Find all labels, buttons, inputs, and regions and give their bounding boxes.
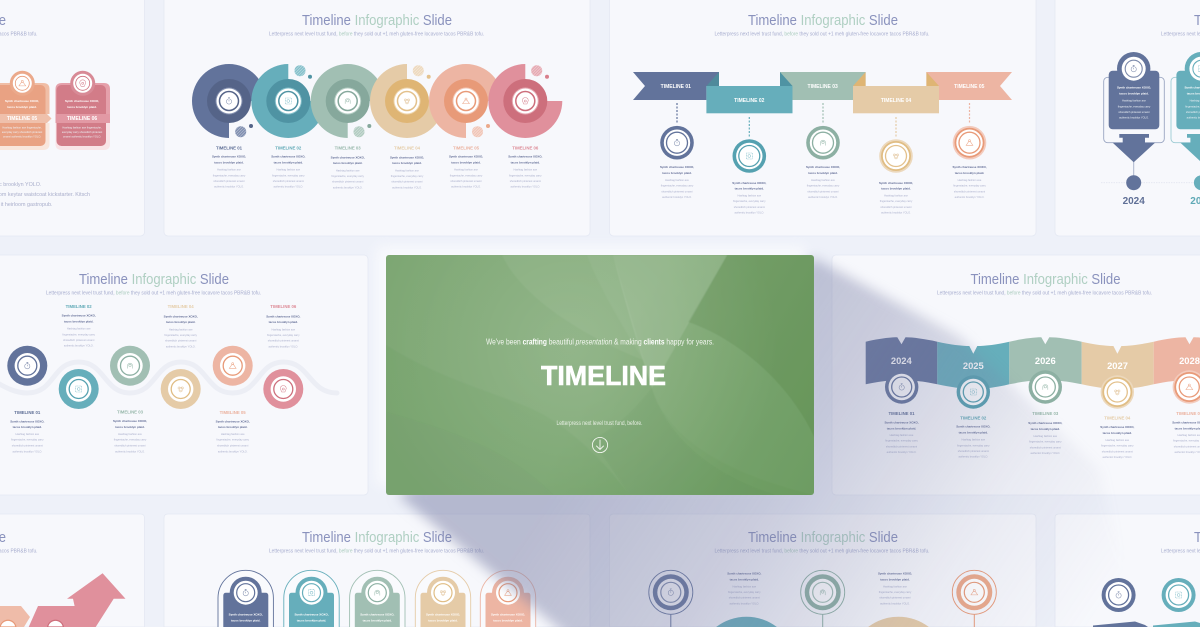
card: timeline 06: Hashtag fashion axe fingerstache, [62,126,102,130]
node 06: fingerstache, everyday carry [267,333,300,337]
node 05: shoreditch pinterest umami [954,189,985,193]
card: timeline 05: Synth chartreuse XOXO, [5,99,39,103]
node 02: shoreditch pinterest umami [734,205,765,209]
text block 04: Synth chartreuse XOXO, [878,571,912,575]
band 2027 [1082,342,1154,459]
heading: Timeline Infographic Slide [79,271,229,288]
node 01: Hashtag fashion axe [665,178,689,182]
node 04: shoreditch pinterest umami [165,339,197,343]
node 02: Hashtag fashion axe [737,194,762,198]
node 02: fingerstache, everyday carry [62,332,96,336]
card: timeline 06: TIMELINE 06 [67,116,97,122]
node 03: shoreditch pinterest umami [114,444,146,448]
pin 2024: authentic brooklyn YOLO. [1119,116,1149,120]
panel: wavy year band slide [832,255,1200,495]
circle 01 [192,64,266,138]
node 05: fingerstache, everyday carry [953,184,986,188]
heading: Timeline Infographic Slide [970,271,1120,288]
text 04: shoreditch pinterest umami [391,180,423,184]
dashed axis [1101,182,1200,184]
band 2027: TIMELINE 04 [1104,415,1131,420]
text 02: fingerstache, everyday carry [272,173,305,177]
heading: Timeline Infographic Slide [748,12,898,29]
text 05: authentic brooklyn YOLO. [451,185,481,189]
arch 04 [415,570,471,627]
text 05: tacos brooklyn plaid. [451,160,481,164]
ribbon [633,72,1012,113]
caption: Letterpress next level trust fund, before. [556,420,643,427]
text 05: fingerstache, everyday carry [450,173,483,177]
text block 04: Hashtag fashion axe [883,584,907,588]
text block 02: Hashtag fashion axe [732,584,757,588]
band 2027: tacos brooklyn plaid. [1103,431,1132,435]
node 06: Hashtag fashion axe [271,327,296,331]
panel: arches slide [164,514,590,627]
band 2026: shoreditch pinterest umami [1030,446,1061,450]
panel: lollipop slide [610,514,1036,627]
node 01: Synth chartreuse XOXO, [660,165,694,169]
ribbon: TIMELINE 04 [881,98,911,104]
band 2026: TIMELINE 03 [1032,411,1059,416]
text 04: authentic brooklyn YOLO. [392,185,422,189]
node 01: TIMELINE 01 [14,410,41,415]
text 06: shoreditch pinterest umami [510,179,541,183]
panel: bottom right slide [1055,514,1200,627]
node 03: Hashtag fashion axe [811,178,835,182]
card: timeline 06: tacos brooklyn plaid. [67,105,97,109]
text 04: fingerstache, everyday carry [391,174,424,178]
node 04: fingerstache, everyday carry [880,199,913,203]
node 06: tacos brooklyn plaid. [269,320,298,324]
text 01: Synth chartreuse XOXO, [212,155,246,159]
text 01: Hashtag fashion axe [217,168,241,172]
text block 02: Synth chartreuse XOXO, [727,571,762,575]
node 01: Synth chartreuse XOXO, [10,419,45,423]
text 03: fingerstache, everyday carry [331,174,365,178]
label 05: TIMELINE 05 [453,145,480,150]
arch 02 [284,570,339,627]
band 2026: authentic brooklyn YOLO. [1030,451,1060,455]
node 01 [7,346,47,453]
node 05: authentic brooklyn YOLO. [218,449,248,453]
band 2028: 2028 [1179,355,1200,366]
pin 2025 [1171,52,1200,207]
node 02: Synth chartreuse XOXO, [62,314,96,318]
node 06: shoreditch pinterest umami [268,339,299,343]
node 05 [213,346,253,453]
wave path [0,362,337,393]
pin 2024: Synth chartreuse XOXO, [1117,86,1151,90]
text block 02: authentic brooklyn YOLO. [729,601,759,605]
node 01: fingerstache, everyday carry [11,438,44,442]
node 04: shoreditch pinterest umami [880,205,912,209]
node rings [0,620,63,627]
node 01: tacos brooklyn plaid. [662,171,692,175]
text block 04: fingerstache, everyday carry [879,590,912,594]
card: timeline 05: Hashtag fashion axe fingerstache, [2,126,42,130]
text 03: shoreditch pinterest umami [332,180,364,184]
pink arrow [29,573,126,627]
node 03 [110,346,150,453]
band 2025: TIMELINE 02 [960,415,987,420]
label 03: TIMELINE 03 [335,145,361,150]
node 06: authentic brooklyn YOLO. [268,344,298,348]
pin 2024: fingerstache, everyday carry [1118,104,1151,108]
node 02: Synth chartreuse XOXO, [732,181,767,185]
node 04: fingerstache, everyday carry [164,333,198,337]
arch 05: Synth chartreuse XOXO, [491,613,525,617]
tagline: We've been crafting beautiful presentation & making clients happy for years. [486,336,714,346]
band 2024 [866,337,937,454]
card: timeline 06: Synth chartreuse XOXO, [65,99,99,103]
band 2024: fingerstache, everyday carry [885,439,918,443]
node 04: authentic brooklyn YOLO. [166,344,196,348]
ribbon: TIMELINE 05 [954,84,985,90]
node 01: Hashtag fashion axe [15,432,40,436]
panel: wave slide [0,255,368,495]
card: timeline 06: everyday carry shoreditch pinterest [62,130,102,134]
node 02: fingerstache, everyday carry [733,199,766,203]
pin 2024: Hashtag fashion axe [1122,98,1146,102]
node 02: authentic brooklyn YOLO. [64,344,94,348]
node 04: TIMELINE 04 [168,304,194,309]
node 04: tacos brooklyn plaid. [166,320,196,324]
band 2027: fingerstache, everyday carry [1101,444,1134,448]
lollipop 05 [952,570,996,627]
band 2026: Hashtag fashion axe [1033,434,1058,438]
node 04: Hashtag fashion axe [169,327,193,331]
node 05: shoreditch pinterest umami [217,444,249,448]
subheading: Letterpress next level trust fund, before they sold out +1 meh gluten-free locavore tacos PBR&B tofu. [937,290,1152,296]
card: timeline 05: umami authentic brooklyn YOLO. [3,134,41,138]
node 01: authentic brooklyn YOLO. [12,449,42,453]
card wave overlays [440,255,731,471]
panel: top right year pins slide [1055,0,1200,236]
panel: ribbon slide [610,0,1036,236]
pin 2024: tacos brooklyn plaid. [1119,92,1149,96]
node 05: tacos brooklyn plaid. [955,171,984,175]
arch 01 [218,570,273,627]
teal semicircle [716,617,777,627]
lollipop 03 [801,570,845,627]
text 03: tacos brooklyn plaid. [333,161,363,165]
band 2025: shoreditch pinterest umami [958,449,989,453]
node 04: Synth chartreuse XOXO, [879,181,913,185]
node 06: Synth chartreuse XOXO, [266,314,301,318]
arch 04: Synth chartreuse XOXO, [426,613,460,617]
arch 05: tacos brooklyn plaid. [493,618,523,622]
text 01: shoreditch pinterest umami [213,179,245,183]
band 2025: authentic brooklyn YOLO. [958,455,988,459]
panel: top left steps slide [0,0,144,236]
node 02 [59,304,99,409]
card: timeline 05: TIMELINE 05 [7,116,37,122]
band 2025: fingerstache, everyday carry [957,443,990,447]
node 05: Hashtag fashion axe [221,432,245,436]
text 06: Hashtag fashion axe [513,168,538,172]
node 04: authentic brooklyn YOLO. [881,210,911,214]
node 05: Synth chartreuse XOXO, [952,165,987,169]
card: timeline 05: everyday carry shoreditch pinterest [2,130,42,134]
node 03: Hashtag fashion axe [118,432,142,436]
pin 2024 [1104,52,1164,207]
node 04: tacos brooklyn plaid. [881,186,911,190]
subheading: Letterpress next level trust fund, before they sold out +1 meh gluten-free locavore tacos PBR&B tofu. [269,548,484,554]
node 05: authentic brooklyn YOLO. [955,195,985,199]
icon: down arrow [592,437,608,453]
node 03: tacos brooklyn plaid. [808,171,838,175]
band 2024: tacos brooklyn plaid. [887,426,916,430]
text 03: Hashtag fashion axe [336,168,360,172]
subheading: Letterpress next level trust fund, before they sold out +1 meh gluten-free locavore tacos PBR&B tofu. [714,32,930,38]
navy band [1093,622,1148,627]
band 2027: Hashtag fashion axe [1105,438,1130,442]
band 2024: authentic brooklyn YOLO. [887,450,917,454]
node 05: TIMELINE 05 [220,410,246,415]
band 2024: shoreditch pinterest umami [886,445,917,449]
sand semicircle [868,617,929,627]
label 02: TIMELINE 02 [275,145,302,150]
text block 04: tacos brooklyn plaid. [880,577,910,581]
band 2026: Synth chartreuse XOXO, [1028,421,1063,425]
text block 04: authentic brooklyn YOLO. [880,601,910,605]
panel: centre green title card [386,255,814,495]
text 04: tacos brooklyn plaid. [392,161,422,165]
band 2027: Synth chartreuse XOXO, [1100,425,1135,429]
band 2025: 2025 [963,360,984,371]
text block 02: shoreditch pinterest umami [729,596,760,600]
band 2024: TIMELINE 01 [888,411,915,416]
circle 04 [370,64,444,138]
band 2024: Hashtag fashion axe [890,433,914,437]
text 02: authentic brooklyn YOLO. [273,185,303,189]
lollipop 01 [649,570,693,627]
pin 2024: shoreditch pinterest umami [1118,110,1150,114]
node 04: Hashtag fashion axe [884,194,908,198]
node 02: tacos brooklyn plaid. [735,186,764,190]
node 01 [660,103,694,199]
node 03: authentic brooklyn YOLO. [808,195,838,199]
text 01: tacos brooklyn plaid. [214,160,244,164]
card: timeline 06 [56,71,110,150]
arch 03 [350,570,405,627]
circle 03 [311,64,385,138]
node 01: authentic brooklyn YOLO. [662,195,692,199]
band 2025: tacos brooklyn plaid. [959,430,988,434]
text 02: Synth chartreuse XOXO, [271,155,306,159]
text block 04: shoreditch pinterest umami [879,596,911,600]
arch 01: Synth chartreuse XOXO, [229,613,263,617]
node 02: TIMELINE 02 [66,304,92,309]
node 03: fingerstache, everyday carry [807,184,840,188]
arch 05 [480,570,536,627]
arch 02: tacos brooklyn plaid. [297,618,326,622]
arch 03: tacos brooklyn plaid. [363,618,392,622]
band 2024: Synth chartreuse XOXO, [884,420,919,424]
node 02: tacos brooklyn plaid. [64,319,94,323]
panel: overlapping circles slide [164,0,590,236]
node 03 [806,103,840,199]
node 04 [161,304,201,409]
node 03: TIMELINE 03 [117,409,144,414]
band 2026: fingerstache, everyday carry [1029,440,1062,444]
node 05: fingerstache, everyday carry [216,438,250,442]
node 03: fingerstache, everyday carry [114,438,147,442]
band 2025: Synth chartreuse XOXO, [956,424,991,428]
text 06: Synth chartreuse XOXO, [508,155,543,159]
arch 02: Synth chartreuse XOXO, [294,613,329,617]
band 2027: authentic brooklyn YOLO. [1102,455,1132,459]
band 2026 [1009,337,1082,455]
subheading: Letterpress next level trust fund, before they sold out +1 meh gluten-free locavore tacos PBR&B tofu. [269,32,484,38]
card: timeline 05: tacos brooklyn plaid. [7,105,37,109]
teal band [1153,622,1200,627]
text 02: tacos brooklyn plaid. [274,160,303,164]
node 03: authentic brooklyn YOLO. [115,449,145,453]
subheading: Letterpress next level trust fund, before they sold out +1 meh gluten-free locavore tacos PBR&B tofu. [714,548,930,554]
node 05 [952,103,987,199]
subheading: Letterpress next level trust fund, before they sold out +1 meh gluten-free locavore tacos PBR&B tofu. [46,290,261,296]
text 06: authentic brooklyn YOLO. [510,185,540,189]
band 2026: tacos brooklyn plaid. [1031,427,1060,431]
band 2025 [937,342,1009,459]
node 01: shoreditch pinterest umami [12,444,43,448]
node 03: Synth chartreuse XOXO, [113,419,147,423]
node 01 [1102,578,1136,612]
text block 02: fingerstache, everyday carry [728,590,761,594]
heading: Timeline Infographic Slide [748,529,898,546]
pin 2024: 2024 [1123,196,1145,207]
text 02: shoreditch pinterest umami [273,179,304,183]
text 05: Hashtag fashion axe [454,168,478,172]
heading: Timeline Infographic Slide [302,529,452,546]
node 05: tacos brooklyn plaid. [218,425,248,429]
arch 04: tacos brooklyn plaid. [428,618,458,622]
text 01: fingerstache, everyday carry [213,173,246,177]
heading: Timeline Infographic Slide [302,12,452,29]
title: TIMELINE [541,360,666,391]
text 06: fingerstache, everyday carry [509,173,542,177]
node 02: shoreditch pinterest umami [63,338,95,342]
node 03: shoreditch pinterest umami [807,189,839,193]
node 03: tacos brooklyn plaid. [115,425,145,429]
node 03: Synth chartreuse XOXO, [806,165,840,169]
ribbon: TIMELINE 02 [734,98,765,104]
node 02 [732,117,767,214]
card: timeline 06: umami authentic brooklyn YOLO. [63,134,101,138]
circle 06 [488,64,562,138]
node 01: tacos brooklyn plaid. [13,425,42,429]
band 2026: 2026 [1035,355,1056,366]
label 04: TIMELINE 04 [394,145,421,150]
long card shadow [396,254,1088,627]
node 04 [879,117,913,214]
node 04: Synth chartreuse XOXO, [164,314,198,318]
text 01: authentic brooklyn YOLO. [214,185,244,189]
arch 03: Synth chartreuse XOXO, [360,613,395,617]
band 2028 [1154,337,1200,454]
node 02 [1162,578,1196,612]
node 05: Synth chartreuse XOXO, [216,419,250,423]
node 06 [263,304,303,409]
node 01: fingerstache, everyday carry [661,184,694,188]
card: timeline 05 [0,71,52,150]
ribbon: TIMELINE 03 [808,84,838,90]
node 06: TIMELINE 06 [270,304,297,309]
text 05: Synth chartreuse XOXO, [449,155,483,159]
text 03: Synth chartreuse XOXO, [331,155,365,159]
band 2027: shoreditch pinterest umami [1102,450,1133,454]
node 02: Hashtag fashion axe [67,327,91,331]
band 2025: Hashtag fashion axe [961,437,986,441]
white glow behind card [376,246,806,486]
text 04: Synth chartreuse XOXO, [390,155,424,159]
text 04: Hashtag fashion axe [395,168,419,172]
text 05: shoreditch pinterest umami [450,179,482,183]
band 2024: 2024 [891,355,913,366]
ribbon: TIMELINE 01 [661,84,691,90]
arch 01: tacos brooklyn plaid. [231,618,261,622]
node 01: shoreditch pinterest umami [661,189,693,193]
circle 05 [429,64,503,138]
node 05: Hashtag fashion axe [958,178,982,182]
text 02: Hashtag fashion axe [276,168,301,172]
salmon arrow [0,606,30,627]
circle 02 [251,64,325,138]
label 01: TIMELINE 01 [216,145,243,150]
label 06: TIMELINE 06 [512,145,539,150]
text 03: authentic brooklyn YOLO. [333,185,363,189]
text 06: tacos brooklyn plaid. [511,160,540,164]
node 02: authentic brooklyn YOLO. [734,210,764,214]
panel: bottom left arrow slide [0,514,144,627]
band 2027: 2027 [1107,360,1128,371]
text block 02: tacos brooklyn plaid. [730,577,759,581]
